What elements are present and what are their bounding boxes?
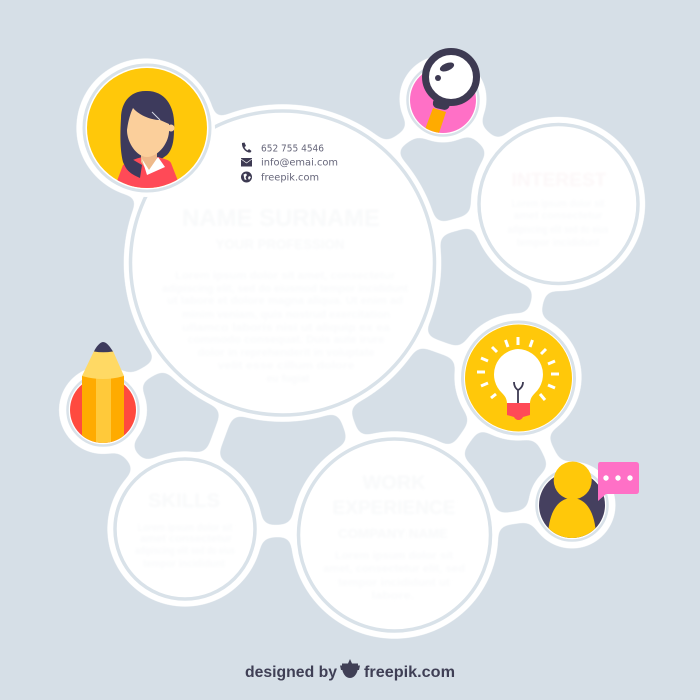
speech bubble bbox=[598, 462, 639, 501]
profile paragraph: ullamco laboris nisi ut aliquip ex ea bbox=[182, 322, 391, 334]
designed by label: designed by bbox=[245, 664, 337, 681]
profile paragraph: dolor in reprehenderit in voluptate bbox=[198, 347, 374, 359]
freepik label: freepik.com bbox=[364, 664, 455, 681]
icon: woman avatar bbox=[84, 65, 210, 191]
profile paragraph: Lorem ipsum dolor sit amet, consectetur bbox=[175, 270, 396, 282]
bulb glass bbox=[494, 349, 543, 404]
avatar white mask bbox=[77, 59, 215, 197]
profile paragraph: velit esse cillum dolore bbox=[218, 360, 354, 372]
main text block bbox=[162, 205, 408, 385]
skills text block bbox=[135, 491, 235, 570]
person figure bbox=[548, 462, 596, 538]
work paragraph: labore. bbox=[372, 590, 414, 602]
work experience text block bbox=[323, 473, 465, 602]
work paragraph bbox=[323, 550, 465, 602]
skills paragraph: amet consectetur bbox=[140, 533, 233, 545]
interest text block bbox=[508, 170, 608, 249]
work paragraph: amet, consectetur elit, sed bbox=[323, 563, 465, 575]
icon: magnifying glass bbox=[408, 52, 478, 136]
email: info@emai.com bbox=[261, 158, 338, 168]
interest paragraph: amet consectetur bbox=[514, 210, 603, 222]
icon: freepik logo bbox=[340, 659, 360, 678]
skills paragraph: adipiscing elit sed do eius bbox=[135, 545, 235, 557]
work paragraph: tempor incididunt ut bbox=[338, 577, 450, 589]
skills paragraph: tempor incididunt bbox=[143, 558, 225, 570]
icon: light bulb bbox=[462, 322, 574, 434]
interest paragraph: Lorem ipsum dolor sit bbox=[512, 198, 605, 210]
interest paragraph: adipiscing elit sed do eius bbox=[508, 224, 608, 236]
interest paragraph: tempor incididunt bbox=[516, 237, 600, 249]
panel: main profile circle bbox=[130, 111, 434, 415]
profile paragraph: ut labore et dolore magna aliqua. Ut enim ad bbox=[167, 295, 403, 307]
panel: work experience circle bbox=[298, 439, 490, 631]
skills paragraph: Lorem ipsum dolor sit bbox=[138, 522, 233, 534]
phone number: 652 755 4546 bbox=[261, 144, 324, 154]
work experience heading: EXPERIENCE bbox=[332, 498, 456, 519]
work experience heading bbox=[332, 473, 456, 519]
name heading: NAME SURNAME bbox=[182, 205, 380, 232]
profession subheading: YOUR PROFESSION bbox=[216, 236, 344, 252]
profile paragraph: adipiscing elit, sed do eiusmod tempor incididunt bbox=[162, 283, 408, 295]
bulb rays bbox=[477, 337, 559, 400]
icon: globe bbox=[241, 172, 252, 182]
contact details bbox=[241, 142, 338, 184]
profile paragraph: eu fugiat bbox=[266, 373, 310, 385]
bulb base bbox=[507, 403, 530, 420]
white bubble network with connectors bbox=[59, 56, 645, 638]
icon: person with speech bubble bbox=[536, 462, 639, 545]
footer credit bbox=[245, 659, 455, 681]
company name: COMPANY NAME bbox=[338, 526, 448, 541]
profile paragraph bbox=[162, 270, 408, 385]
work paragraph: Lorem ipsum dolor sit bbox=[335, 550, 453, 562]
icon: pencil bbox=[68, 342, 138, 446]
interest heading: INTEREST bbox=[512, 170, 606, 190]
bulb filament bbox=[514, 382, 523, 403]
profile paragraph: minim veniam, quis nostrud exercitation bbox=[182, 309, 390, 321]
interest paragraph bbox=[508, 198, 608, 249]
panel: skills circle bbox=[115, 459, 255, 599]
panel: interest circle bbox=[479, 124, 638, 284]
icon: phone bbox=[242, 142, 252, 153]
profile paragraph: commodo consequat. Duis aute irure bbox=[188, 334, 384, 346]
skills paragraph bbox=[135, 522, 235, 570]
skills heading: SKILLS bbox=[148, 491, 220, 512]
icon: envelope bbox=[241, 158, 252, 166]
work experience heading: WORK bbox=[362, 473, 426, 494]
website: freepik.com bbox=[261, 172, 319, 184]
